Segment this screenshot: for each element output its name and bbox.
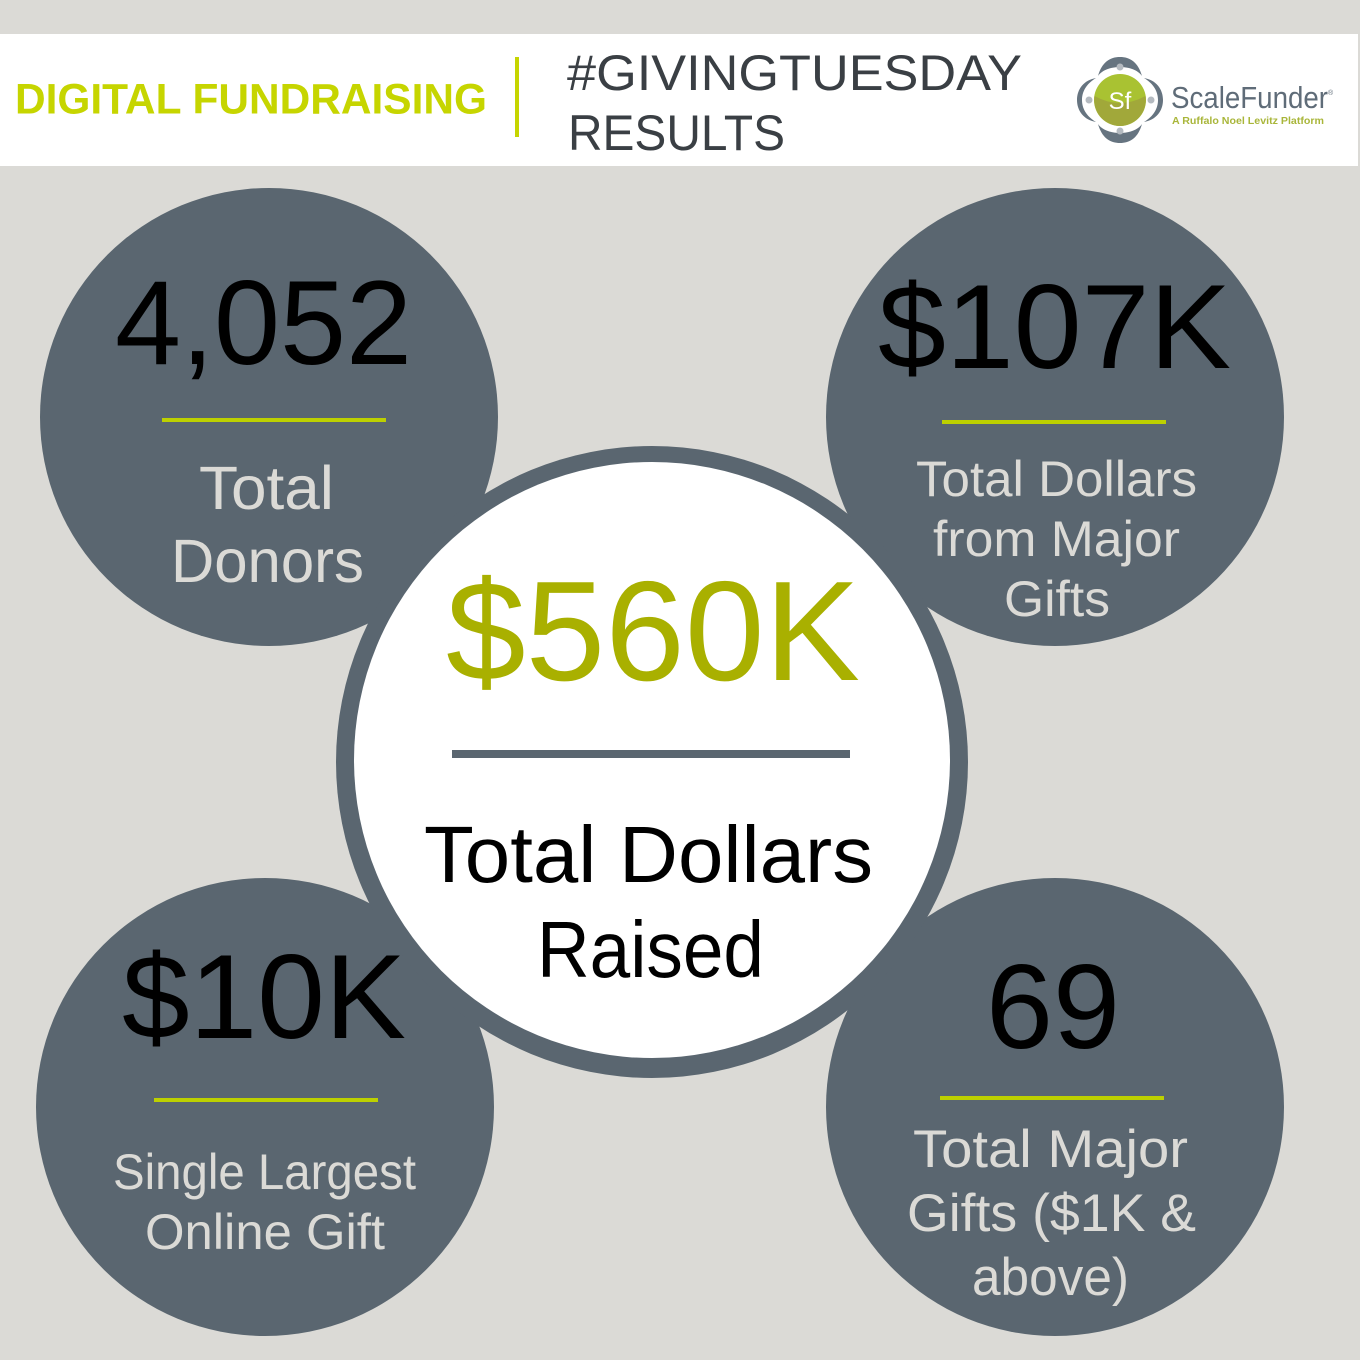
label: single largest online gift bbox=[113, 1144, 416, 1260]
heading: giving tuesday results: #GIVINGTUESDAY bbox=[567, 45, 1022, 101]
stat: 4,052: 4,052 bbox=[115, 256, 412, 390]
label: total donors: Donors bbox=[171, 527, 364, 595]
label: single largest online gift: Single Largest bbox=[113, 1144, 416, 1200]
panel: total dollars raised bbox=[336, 446, 968, 1078]
label: total major gifts: Gifts ($1K & bbox=[907, 1184, 1196, 1243]
heading: giving tuesday results bbox=[567, 45, 1022, 161]
label: total dollars raised bbox=[424, 810, 873, 994]
stat: $107K: $107K bbox=[878, 260, 1231, 394]
logo: ScaleFunder: Sf bbox=[1109, 88, 1132, 115]
label: total dollars raised: Total Dollars bbox=[424, 810, 873, 899]
label: total dollars from major gifts bbox=[916, 451, 1197, 627]
stat: $560K: $560K bbox=[446, 552, 860, 711]
panel: single largest online gift bbox=[36, 878, 494, 1336]
label: total dollars from major gifts: from Major bbox=[933, 511, 1180, 567]
logo: ScaleFunder: A Ruffalo Noel Levitz Platform bbox=[1172, 115, 1324, 127]
label: total major gifts: Total Major bbox=[913, 1120, 1188, 1179]
label: total donors: Total bbox=[199, 454, 334, 522]
label: total dollars raised: Raised bbox=[537, 905, 764, 994]
label: total dollars from major gifts: Total Dollars bbox=[916, 451, 1197, 507]
stat: 69: 69 bbox=[986, 940, 1120, 1074]
heading: giving tuesday results: RESULTS bbox=[568, 105, 785, 161]
label: total major gifts: above) bbox=[972, 1248, 1129, 1307]
logo: ScaleFunder: ® bbox=[1328, 89, 1334, 97]
stat: $10K: $10K bbox=[122, 930, 406, 1064]
panel: total major gifts bbox=[826, 878, 1284, 1336]
label: total dollars from major gifts: Gifts bbox=[1004, 571, 1110, 627]
label: single largest online gift: Online Gift bbox=[145, 1204, 385, 1260]
panel: total donors bbox=[40, 188, 498, 646]
logo: ScaleFunder: ScaleFunder bbox=[1171, 80, 1328, 115]
logo: ScaleFunder bbox=[1077, 57, 1334, 143]
header banner bbox=[0, 34, 1358, 166]
label: total donors bbox=[171, 454, 364, 595]
heading: digital fundraising: DIGITAL FUNDRAISING bbox=[15, 76, 487, 124]
label: total major gifts bbox=[907, 1120, 1196, 1307]
panel: total dollars from major gifts bbox=[826, 188, 1284, 646]
